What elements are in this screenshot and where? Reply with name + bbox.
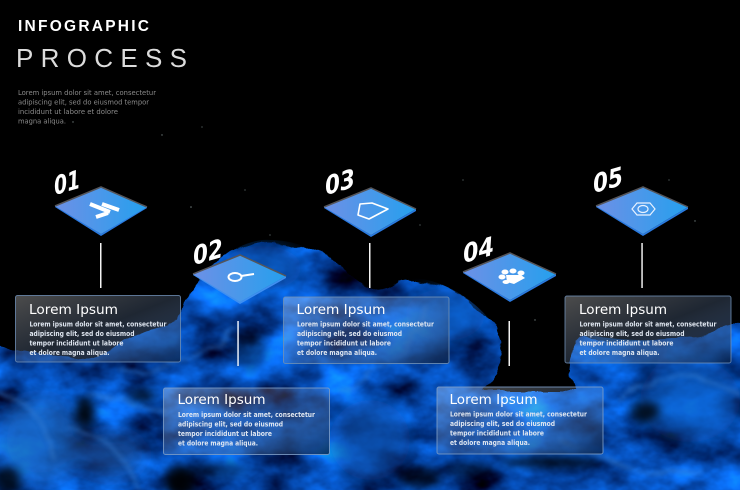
number 04: 04	[462, 231, 495, 269]
card 05 body	[580, 320, 717, 357]
diamond 05	[596, 187, 688, 236]
card 03 body: Lorem ipsum dolor sit amet, consectetur	[297, 320, 435, 328]
diamond 01	[55, 187, 147, 236]
card 04	[437, 387, 603, 454]
card 05	[565, 296, 731, 363]
card 03 heading: Lorem Ipsum	[296, 303, 386, 318]
connector 03	[369, 243, 370, 288]
card 03 body: adipiscing elit, sed do eiusmod	[297, 330, 402, 338]
intro text: Lorem ipsum dolor sit amet, consectetur	[18, 89, 156, 97]
card 04 body: tempor incididunt ut labore	[450, 430, 544, 438]
heading: process: PROCESS	[16, 43, 187, 73]
title	[16, 18, 187, 73]
card 02 body	[178, 411, 316, 448]
card 04 body	[450, 410, 588, 447]
icon: magnifier	[228, 273, 254, 281]
connector 05	[641, 243, 643, 288]
card 02 body: adipiscing elit, sed do eiusmod	[178, 420, 283, 428]
diamond 02	[193, 255, 286, 304]
icon: hexagon gear	[632, 203, 655, 215]
intro text	[18, 89, 156, 126]
heading: infographic: INFOGRAPHIC	[18, 18, 149, 35]
card 01 body	[30, 320, 167, 357]
card 02	[164, 388, 330, 454]
card 03 body: tempor incididunt ut labore	[297, 340, 391, 348]
connector 04	[508, 321, 510, 366]
number 03: 03	[324, 163, 356, 201]
card 05 body: tempor incididunt ut labore	[580, 340, 674, 348]
connector 02	[237, 321, 239, 366]
step 02	[192, 233, 286, 366]
card 01 body: Lorem ipsum dolor sit amet, consectetur	[30, 320, 167, 328]
card 03 body	[297, 320, 435, 357]
step 04	[462, 231, 556, 366]
card 02 body: Lorem ipsum dolor sit amet, consectetur	[178, 411, 316, 419]
card 01 heading: Lorem Ipsum	[29, 303, 118, 318]
number 05: 05	[592, 161, 624, 199]
connector 01	[100, 243, 102, 288]
card 01 body: tempor incididunt ut labore	[30, 340, 124, 348]
card 05 body: Lorem ipsum dolor sit amet, consectetur	[580, 320, 717, 328]
number 01: 01	[53, 165, 82, 201]
card 05 body: et dolore magna aliqua.	[580, 349, 660, 357]
card 02 body: et dolore magna aliqua.	[178, 440, 258, 448]
card 04 body: et dolore magna aliqua.	[450, 439, 530, 447]
card 01 body: adipiscing elit, sed do eiusmod	[30, 330, 135, 338]
card 02 heading: Lorem Ipsum	[178, 393, 266, 408]
step 01	[53, 165, 147, 288]
stars	[72, 121, 696, 321]
diamond 04	[463, 253, 556, 302]
blue ink smoke	[0, 240, 740, 490]
intro text: adipiscing elit, sed do eiusmod tempor	[18, 98, 149, 106]
card 01	[16, 296, 180, 362]
card 04 body: Lorem ipsum dolor sit amet, consectetur	[450, 410, 588, 418]
card 04 body: adipiscing elit, sed do eiusmod	[450, 420, 555, 428]
step 05	[592, 161, 688, 288]
dark patches in smoke	[0, 330, 660, 490]
card 03	[284, 297, 449, 364]
card 01 body: et dolore magna aliqua.	[30, 349, 110, 357]
number 02: 02	[192, 233, 224, 271]
intro text: incididunt ut labore et dolore	[18, 108, 118, 116]
wisps in smoke	[0, 310, 740, 490]
intro text: magna aliqua.	[18, 118, 66, 126]
card 02 body: tempor incididunt ut labore	[178, 430, 272, 438]
icon: group of people	[498, 268, 525, 284]
diamond 03	[324, 188, 416, 237]
icon: pentagon	[358, 203, 388, 219]
card 04 heading: Lorem Ipsum	[450, 393, 538, 408]
icon: bars	[90, 204, 119, 217]
card 03 body: et dolore magna aliqua.	[297, 349, 377, 357]
bright patches in smoke	[0, 246, 740, 482]
card 05 body: adipiscing elit, sed do eiusmod	[580, 330, 685, 338]
step 03	[324, 163, 416, 288]
card 05 heading: Lorem Ipsum	[579, 303, 667, 318]
